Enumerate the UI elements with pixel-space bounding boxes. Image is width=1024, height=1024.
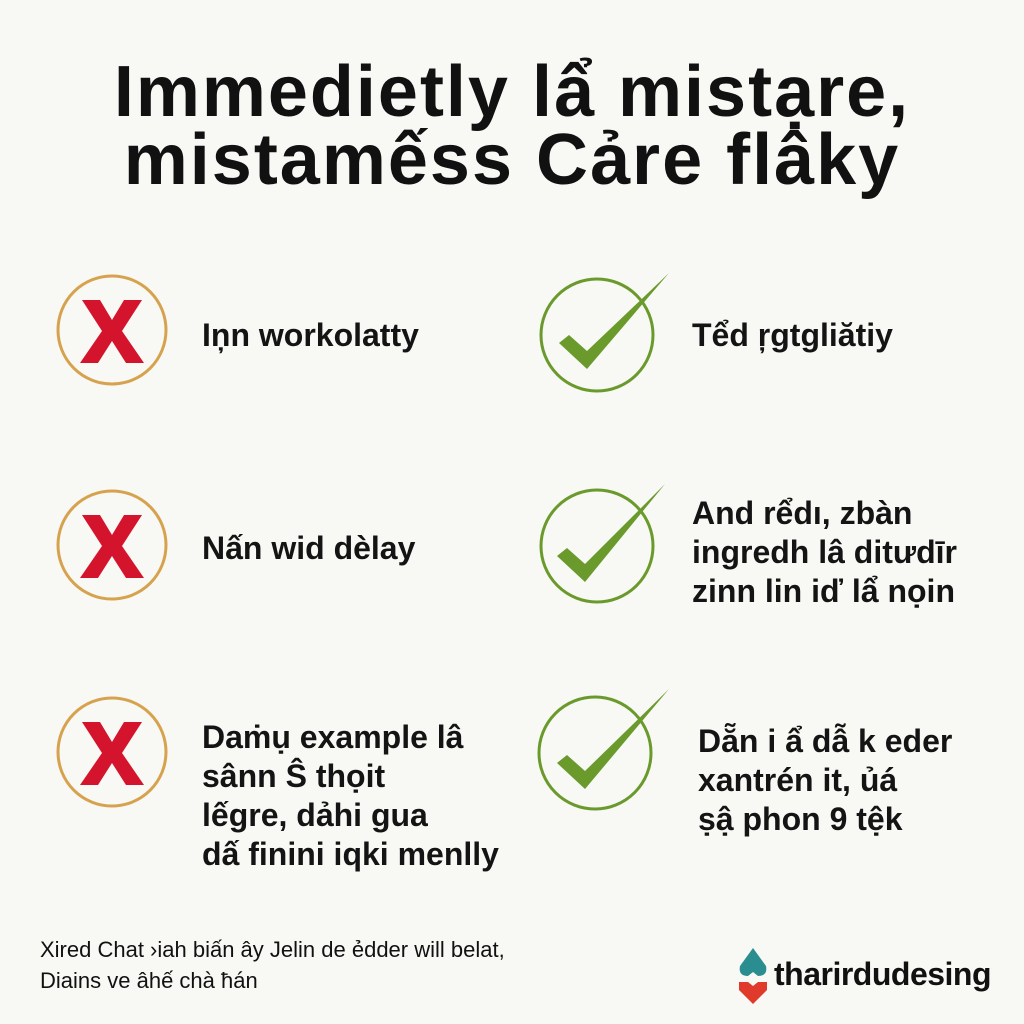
text: right 3: xantrén it, ủá <box>698 762 897 798</box>
text: left 3: sânn Ŝ thọit <box>202 758 385 794</box>
text: right 1: Tểd ŗgtgliătiy <box>692 317 893 353</box>
text: right 3 <box>698 723 952 837</box>
icon: x 2 <box>56 490 168 600</box>
text: right 3: Dẵn i ẩ dẫ k eder <box>698 723 952 759</box>
title: Immedietly lẩ mistạre, <box>114 52 910 132</box>
logo <box>739 948 991 1004</box>
text: right 2: And rểdı, zbàn <box>692 495 912 531</box>
icon: check 3 <box>538 689 669 810</box>
footer text <box>40 937 505 993</box>
title: mistamếss Cảre flâky <box>124 120 900 200</box>
text: right 3: ṣậ phon 9 tệk <box>698 801 902 837</box>
text: left 2: Nấn wid dèlay <box>202 530 415 566</box>
footer text: Diains ve âhế chà ħán <box>40 968 258 993</box>
title <box>114 52 910 200</box>
text: right 2 <box>692 495 957 609</box>
text: left 1: Iņn workolatty <box>202 317 419 353</box>
logo text: tharirdudesing <box>774 956 991 992</box>
icon: check 2 <box>540 484 665 604</box>
icon: logo mark <box>739 948 767 1004</box>
text: right 2: ingredh lâ ditưdīr <box>692 534 957 570</box>
icon: x 3 <box>56 696 168 808</box>
text: left 3 <box>202 719 499 872</box>
text: left 3: Daṁụ example lâ <box>202 719 463 755</box>
footer text: Xired Chat ›iah biấn ây Jelin de ẻdder will belat, <box>40 937 505 962</box>
text: left 3: lếgre, dảhi gua <box>202 797 428 833</box>
icon: x 1 <box>56 274 168 386</box>
text: right 2: zinn lin iď lẩ nọin <box>692 573 955 609</box>
icon: check 1 <box>540 273 669 392</box>
text: left 3: dấ finini iqki menlly <box>202 836 499 872</box>
